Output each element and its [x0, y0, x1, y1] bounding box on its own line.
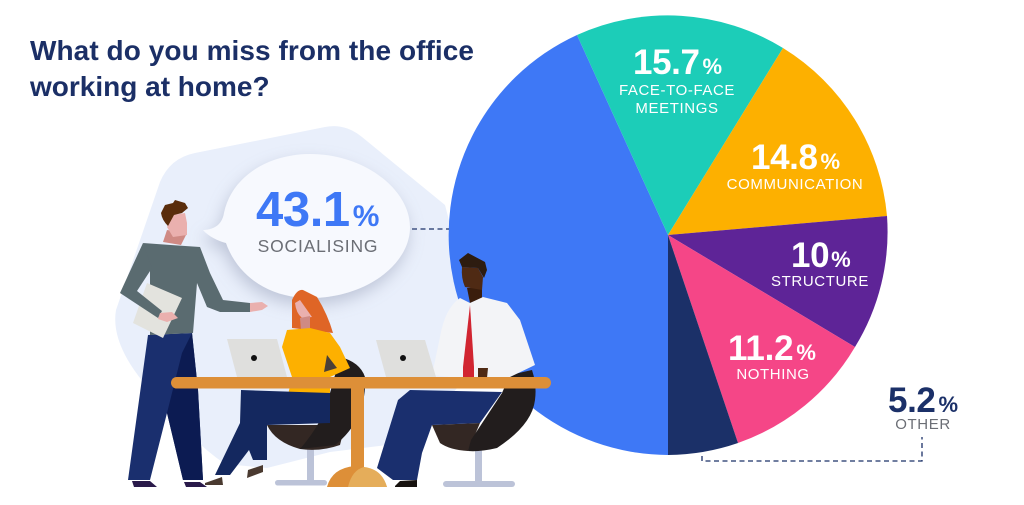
slice: nothing	[668, 235, 855, 443]
speech bubble	[203, 154, 410, 298]
sweater	[282, 328, 350, 395]
slice: face-to-face meetings	[577, 15, 783, 235]
trousers	[215, 390, 330, 475]
trousers	[128, 333, 203, 480]
label text: face-to-face meetings: FACE-TO-FACE	[619, 82, 735, 99]
shoes	[247, 465, 263, 478]
laptop	[376, 340, 436, 377]
shoes	[132, 481, 157, 487]
label text: face-to-face meetings	[619, 82, 735, 117]
label text: communication: COMMUNICATION	[727, 176, 863, 193]
neck	[467, 288, 482, 303]
hair	[161, 200, 188, 226]
table	[171, 377, 551, 487]
connector: socialising	[412, 228, 449, 230]
slice: communication	[668, 48, 887, 235]
illustration backdrop blob	[115, 126, 475, 468]
stat label: SOCIALISING	[258, 236, 378, 256]
face	[462, 267, 483, 290]
person: seated woman	[205, 290, 350, 485]
hand holding clipboard	[158, 312, 178, 322]
label text: nothing: NOTHING	[736, 366, 810, 383]
tie	[463, 305, 474, 378]
slice: structure	[668, 216, 888, 347]
forearm	[120, 243, 162, 318]
label text: face-to-face meetings: MEETINGS	[635, 100, 719, 117]
hand	[478, 368, 488, 378]
label: other: 5.2%	[888, 381, 958, 420]
label text: structure: STRUCTURE	[771, 273, 869, 290]
person: standing man	[120, 200, 268, 487]
face	[167, 213, 187, 237]
chair: man	[432, 370, 536, 487]
label: communication: 14.8%	[751, 138, 840, 177]
slice: other	[668, 235, 738, 455]
shirt	[432, 297, 535, 377]
label: structure: 10%	[791, 236, 850, 275]
hair	[459, 253, 487, 278]
chair: woman	[267, 357, 365, 486]
shoe	[395, 480, 417, 487]
clipboard	[133, 283, 182, 338]
connector: other	[702, 437, 922, 461]
title: working at home?	[29, 71, 270, 102]
pointing hand	[250, 302, 268, 312]
pie chart	[449, 15, 888, 455]
label: nothing: 11.2%	[728, 329, 816, 368]
face	[295, 300, 312, 318]
label: face-to-face meetings: 15.7%	[633, 43, 722, 82]
slice: socialising	[449, 35, 668, 455]
hair	[292, 290, 333, 333]
person: seated man	[376, 253, 535, 487]
title	[29, 35, 474, 102]
laptop	[227, 339, 287, 377]
neck	[163, 230, 187, 245]
label text: other: OTHER	[895, 416, 951, 433]
title: What do you miss from the office	[30, 35, 474, 66]
sweater	[143, 243, 250, 335]
stat: socialising: 43.1%	[256, 183, 379, 237]
trousers	[377, 390, 502, 480]
